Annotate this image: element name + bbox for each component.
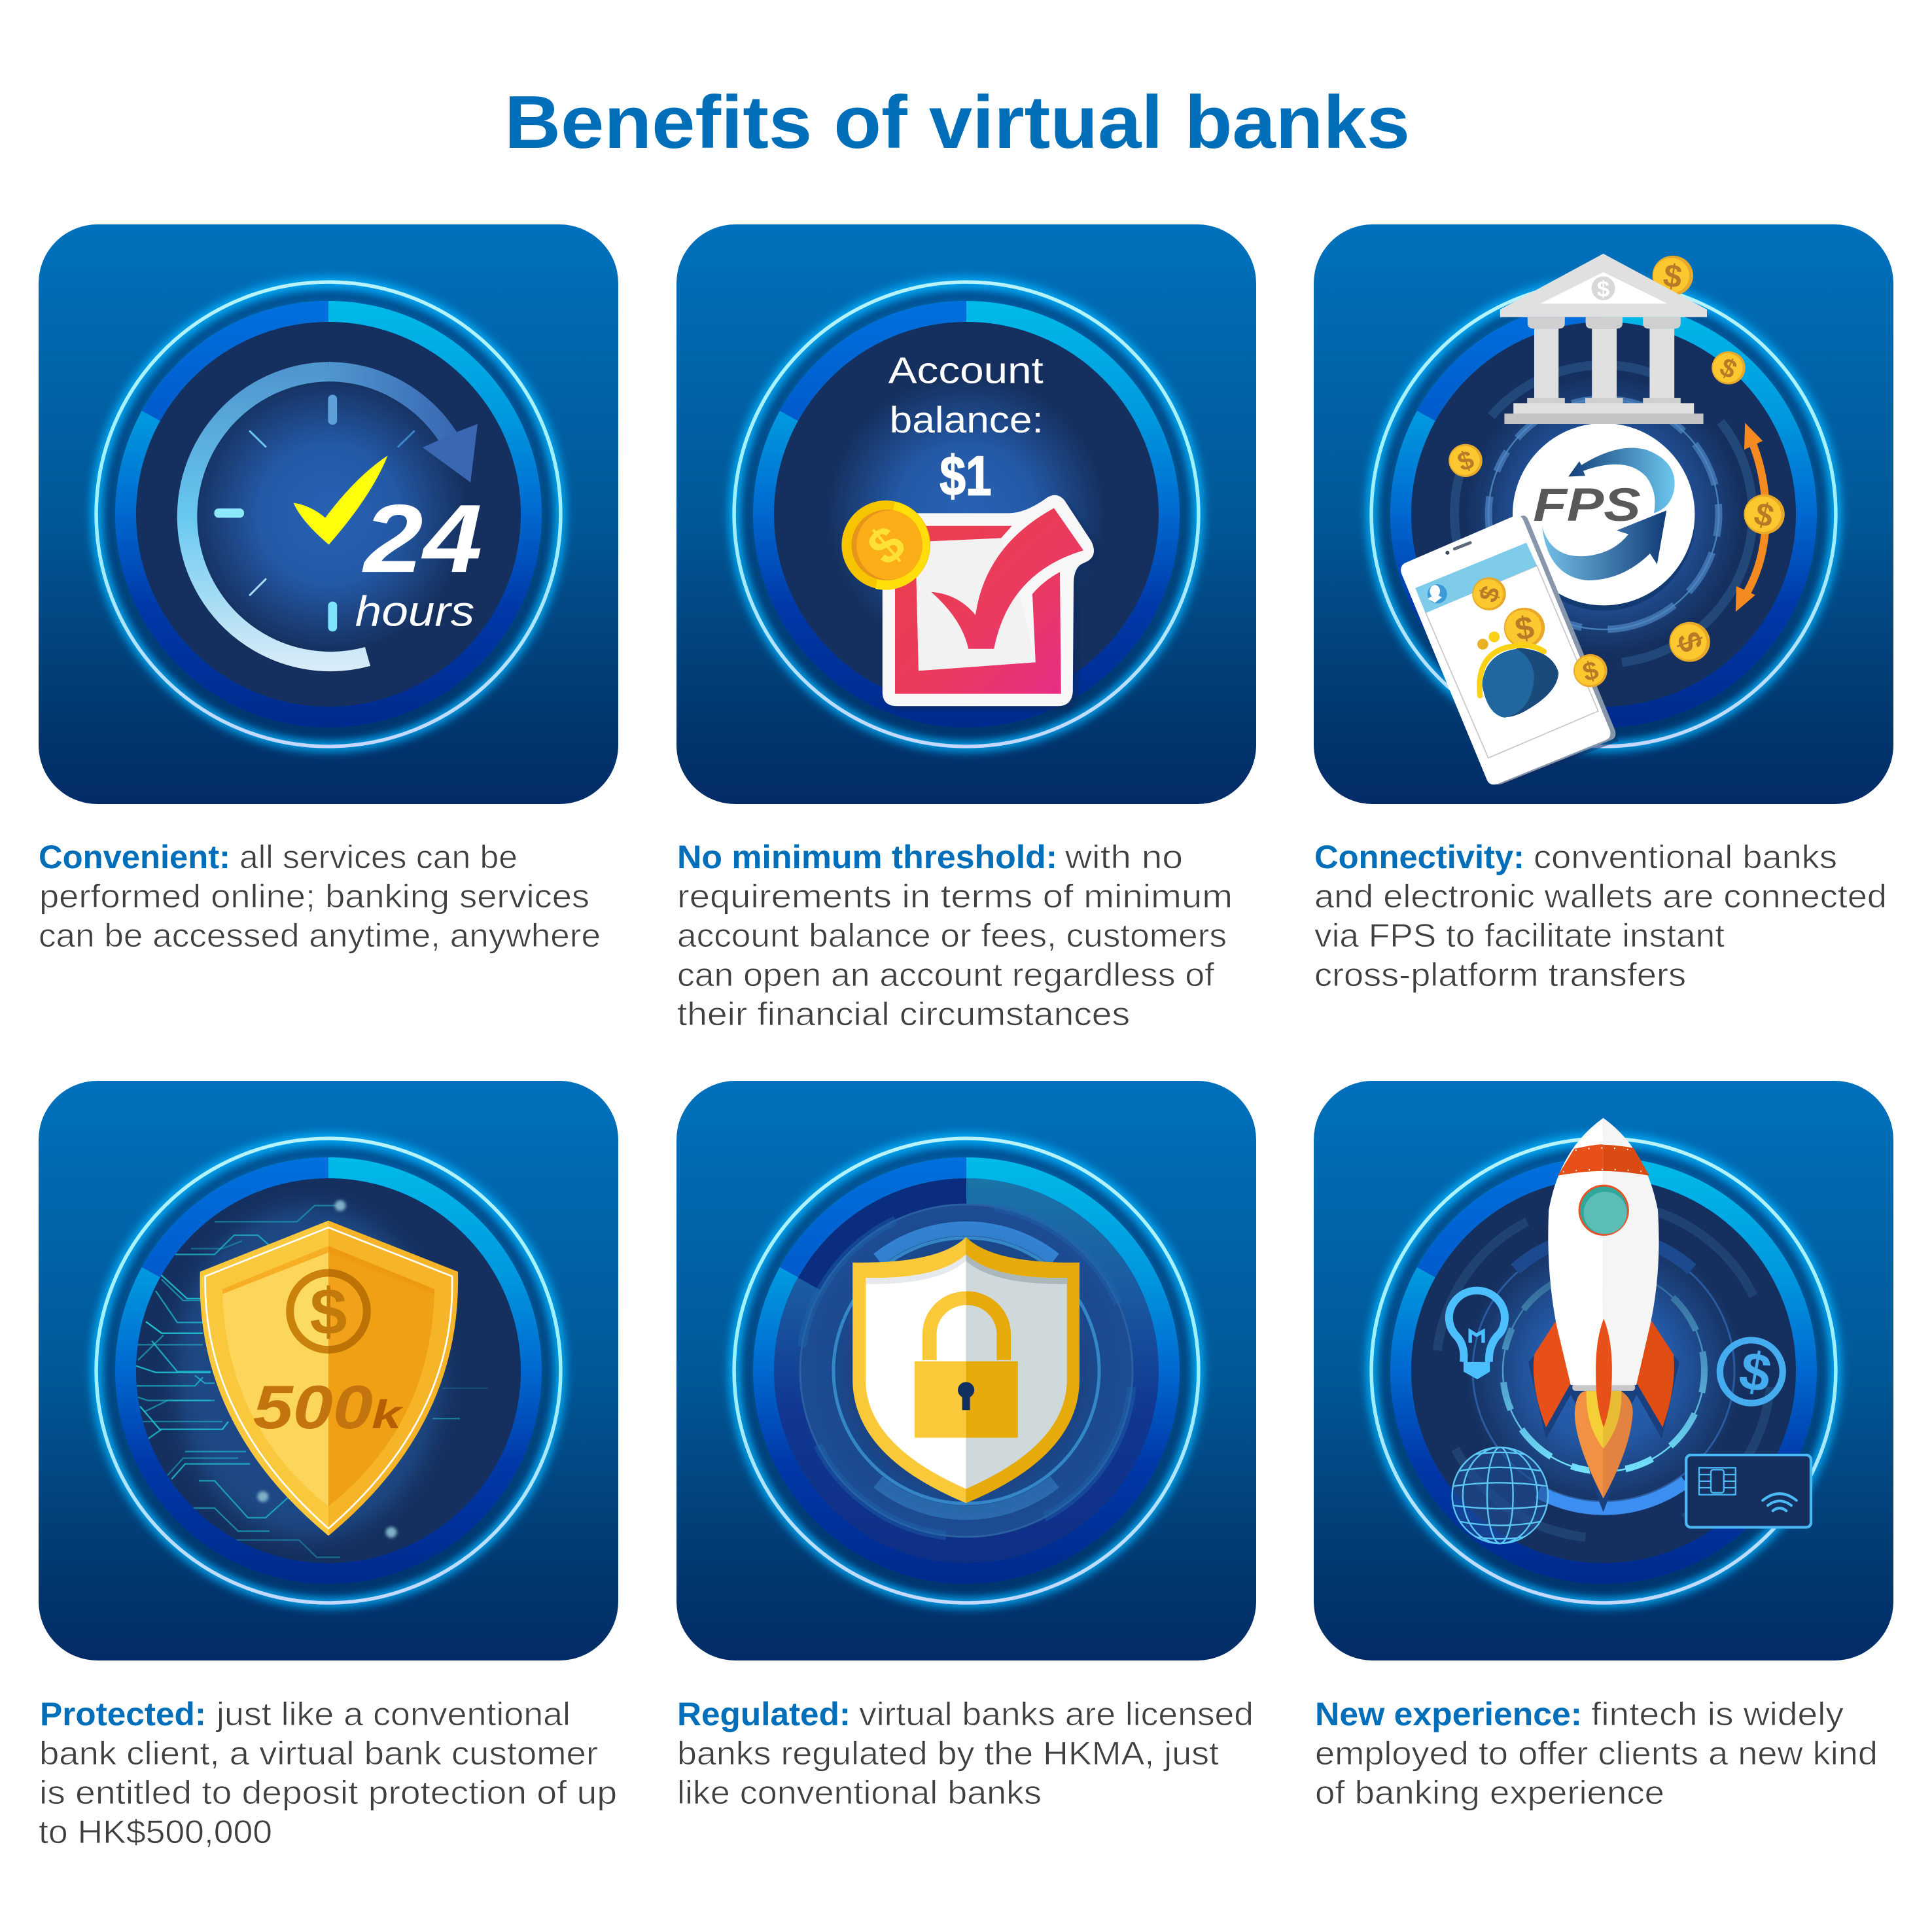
circuit lines xyxy=(136,1206,487,1557)
text: connectivity: cross-platform transfers xyxy=(1314,957,1686,993)
arrow: orange two-way xyxy=(1736,423,1766,612)
label: account balance xyxy=(888,350,1044,507)
icon: padlock shield xyxy=(852,1237,1080,1503)
shield xyxy=(200,1221,458,1536)
text: protected: just like a conventional xyxy=(215,1696,571,1732)
panel: regulated xyxy=(676,1081,1256,1811)
translucent disk with tech rings xyxy=(774,1178,1159,1563)
text: new experience xyxy=(1315,1696,1878,1811)
icon: contactless card xyxy=(1686,1455,1811,1527)
panel: protected xyxy=(39,1081,618,1850)
text: new experience: New experience: xyxy=(1315,1696,1582,1732)
label: hours: hours xyxy=(355,588,474,635)
glowing ring xyxy=(734,282,1199,746)
dark disk xyxy=(136,322,521,707)
text: new experience: fintech is widely xyxy=(1591,1696,1844,1732)
title: Benefits of virtual banks xyxy=(504,81,1410,164)
label: account balance: balance: xyxy=(890,399,1044,441)
tech rings xyxy=(1454,365,1753,663)
icon: floating coins: $ xyxy=(1751,495,1778,535)
text: protected: is entitled to deposit protection of up xyxy=(39,1774,617,1811)
card background xyxy=(39,1081,618,1660)
icon: gold coin: $ xyxy=(856,514,916,576)
text: no minimum threshold: account balance or fees, customers xyxy=(677,917,1227,954)
text: protected: to HK$500,000 xyxy=(39,1814,272,1850)
shield: 500 xyxy=(253,1373,373,1442)
text: no minimum threshold xyxy=(677,839,1233,1032)
text: connectivity: Connectivity: xyxy=(1314,839,1524,875)
icon: floating coins xyxy=(1449,351,1785,662)
padlock xyxy=(915,1298,1018,1438)
shield: $ xyxy=(310,1276,347,1348)
tech rings xyxy=(1436,1203,1771,1538)
text: convenient xyxy=(39,839,601,954)
text: regulated: virtual banks are licensed xyxy=(859,1696,1254,1732)
circular arrow xyxy=(187,372,478,661)
panel: new experience xyxy=(1314,1081,1893,1811)
glowing ring xyxy=(734,1138,1199,1603)
icon: account balance xyxy=(841,350,1099,711)
icon: gold coin xyxy=(841,501,930,590)
icon: phone with wallet: $ xyxy=(1473,582,1506,606)
text: protected: bank client, a virtual bank customer xyxy=(39,1735,598,1772)
sticker check box xyxy=(883,495,1099,711)
card background xyxy=(39,224,618,804)
text: protected: Protected: xyxy=(40,1696,206,1732)
text: no minimum threshold: with no xyxy=(1064,839,1183,875)
card background xyxy=(676,1081,1256,1660)
text: new experience: employed to offer clients a new kind xyxy=(1315,1735,1878,1772)
shield glow xyxy=(175,1206,442,1537)
glowing ring xyxy=(96,282,561,746)
panel: no minimum threshold xyxy=(676,224,1256,1032)
label: account balance: $1 xyxy=(940,446,992,507)
icon: wire globe xyxy=(1452,1447,1548,1543)
icon: new experience illustration xyxy=(1449,1118,1811,1543)
text: convenient: all services can be xyxy=(239,839,518,875)
text: convenient: Convenient: xyxy=(39,839,230,875)
text: connectivity: conventional banks xyxy=(1534,839,1837,875)
dark disk xyxy=(136,1178,521,1563)
icon: 24 hour clock xyxy=(187,372,482,661)
label: account balance: Account xyxy=(888,350,1044,392)
text: regulated: like conventional banks xyxy=(677,1774,1042,1811)
clock ticks xyxy=(214,395,414,631)
icon: phone with wallet xyxy=(1401,516,1619,787)
text: no minimum threshold: No minimum threshold: xyxy=(677,839,1057,875)
icon: floating coins: $ xyxy=(1715,351,1742,385)
text: connectivity: and electronic wallets are connected xyxy=(1314,878,1887,915)
icon: rocket xyxy=(1528,1118,1679,1512)
text: regulated: banks regulated by the HKMA, just xyxy=(677,1735,1219,1772)
label: 24: 24 xyxy=(362,485,482,593)
icon: FPS circle logo: FPS xyxy=(1533,479,1641,531)
shield: k xyxy=(372,1392,404,1437)
card background xyxy=(1314,224,1893,804)
text: convenient: performed online; banking services xyxy=(39,878,589,915)
icon: phone with wallet: $ xyxy=(1579,655,1602,687)
icon: deposit protection shield xyxy=(136,1200,487,1557)
dark disk xyxy=(1411,1178,1796,1563)
text: convenient: can be accessed anytime, anywhere xyxy=(39,917,601,954)
dark disk xyxy=(774,322,1159,707)
icon: coin behind bank: $ xyxy=(1661,257,1685,295)
dark disk xyxy=(1411,322,1796,707)
card background xyxy=(1314,1081,1893,1660)
glowing ring xyxy=(1371,1138,1836,1603)
card background xyxy=(676,224,1256,804)
icon: floating coins: $ xyxy=(1670,627,1710,657)
glowing ring xyxy=(96,1138,561,1603)
text: regulated: Regulated: xyxy=(677,1696,851,1732)
icon: light bulb xyxy=(1449,1291,1505,1379)
shield xyxy=(852,1237,1080,1503)
icon: bank building xyxy=(1500,254,1707,424)
icon: phone with wallet: $ xyxy=(1512,608,1537,648)
text: connectivity: via FPS to facilitate instant xyxy=(1314,917,1725,954)
icon: dollar circle xyxy=(1720,1340,1783,1404)
icon: FPS circle logo xyxy=(1513,423,1695,611)
icon: connectivity illustration xyxy=(1401,254,1785,787)
panel: convenient xyxy=(39,224,618,954)
icon: dollar circle: $ xyxy=(1735,1340,1776,1404)
text: protected xyxy=(39,1696,617,1850)
yellow check xyxy=(294,455,388,544)
icon: coin behind bank xyxy=(1653,256,1693,296)
text: no minimum threshold: their financial circumstances xyxy=(677,996,1130,1032)
text: new experience: of banking experience xyxy=(1315,1774,1664,1811)
text: no minimum threshold: requirements in terms of minimum xyxy=(677,878,1233,915)
panel: connectivity xyxy=(1314,224,1893,993)
glowing dots xyxy=(257,1200,396,1537)
glowing ring xyxy=(1371,282,1836,746)
text: connectivity xyxy=(1314,839,1887,993)
text: no minimum threshold: can open an account regardless of xyxy=(677,957,1214,993)
icon: floating coins: $ xyxy=(1453,444,1478,477)
icon: bank building: $ xyxy=(1597,277,1609,302)
text: regulated xyxy=(677,1696,1254,1811)
